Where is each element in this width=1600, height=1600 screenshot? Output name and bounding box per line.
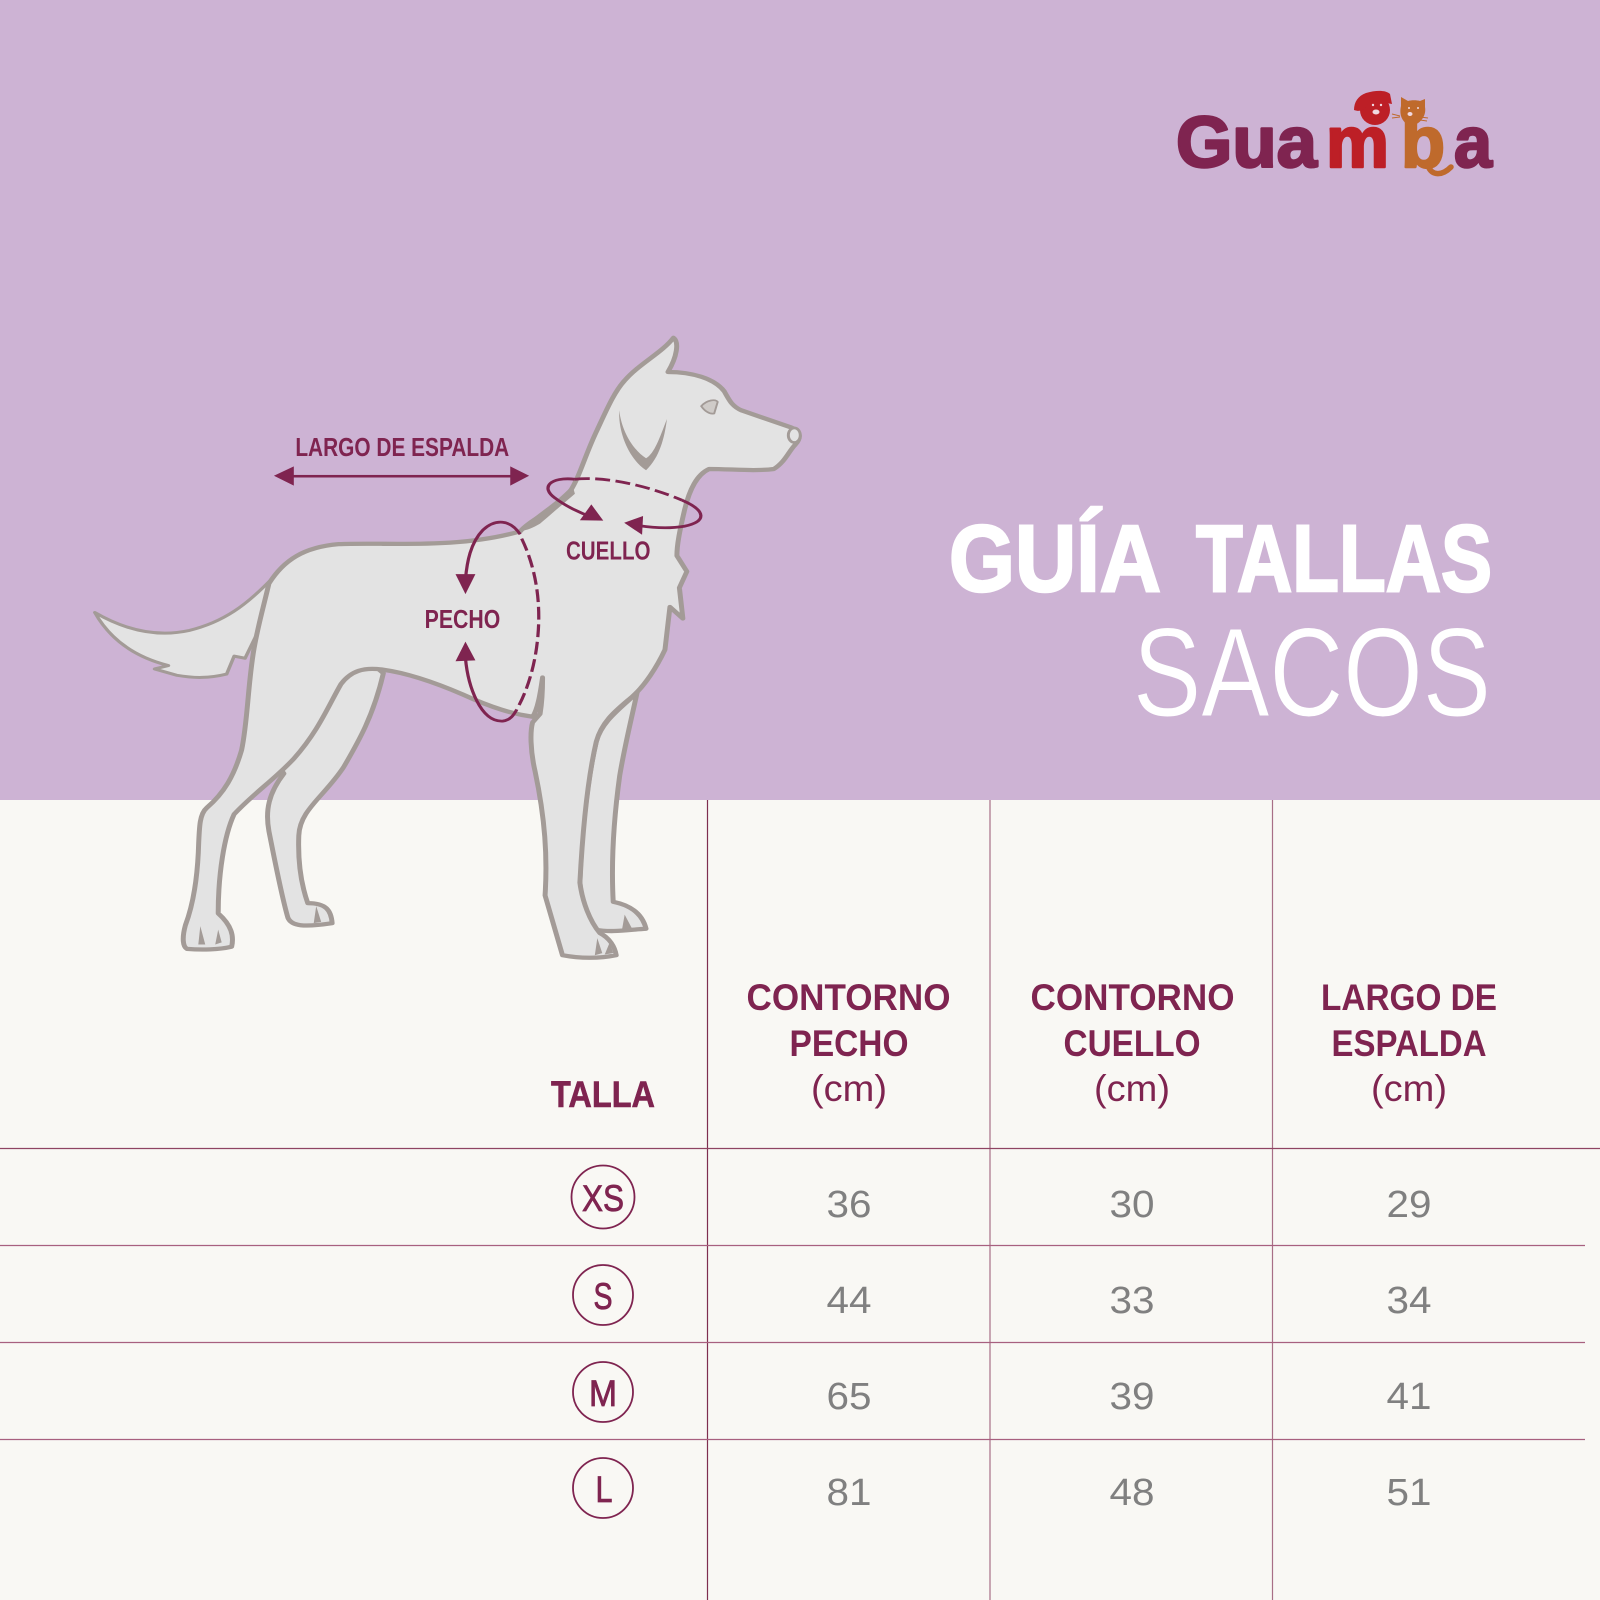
logo wordmark: b: b [1401,103,1445,183]
table values: largo de espalda [1386,1184,1432,1514]
heading: Sacos: SACOS [1133,602,1491,743]
table header: contorno cuello: CUELLO [1064,1023,1200,1064]
icon: cat head [1392,97,1428,126]
table values: contorno cuello: 33 [1110,1280,1154,1322]
logo wordmark: m: m [1326,103,1389,183]
size badge: S [573,1265,633,1325]
label: cuello: CUELLO [566,537,651,565]
table values: contorno pecho: 81 [826,1472,872,1514]
table header: largo de espalda: ESPALDA [1332,1023,1486,1064]
table values: contorno cuello: 39 [1110,1376,1154,1418]
dog: ear [619,410,667,470]
table values: contorno pecho: 44 [826,1280,872,1322]
measure: neck guide [548,479,701,535]
size badge: M: M [589,1373,617,1414]
panel: purple header background [0,0,1600,800]
illustration: dog with measurement guides [95,338,800,958]
table values: largo de espalda: 34 [1386,1280,1432,1322]
table header: largo de espalda: LARGO DE [1321,977,1497,1018]
table header: contorno cuello: (cm) [1094,1068,1170,1109]
table header: contorno pecho: CONTORNO [746,977,950,1018]
table header: talla: TALLA [551,1074,655,1115]
table values: contorno cuello [1110,1184,1154,1514]
title: Guía Tallas Sacos [949,506,1492,743]
table values: contorno cuello: 48 [1110,1472,1154,1514]
table header: largo de espalda: (cm) [1371,1068,1447,1109]
dog: body and near legs [183,338,799,958]
dog: nose [788,428,800,442]
table values: largo de espalda: 51 [1386,1472,1432,1514]
dog: neck fur [520,485,575,531]
label: pecho: PECHO [425,605,500,633]
dog: paw toes [198,906,632,955]
dog: far front leg [580,692,646,931]
table grid lines [0,800,1600,1600]
table values: largo de espalda: 29 [1386,1184,1432,1226]
logo: Guamba [1176,91,1493,183]
table values: contorno pecho [826,1184,872,1514]
heading: Guía Tallas [949,506,1492,612]
size badge: M [573,1362,633,1422]
size badge: S: S [594,1276,612,1317]
table header: contorno pecho: PECHO [790,1023,908,1064]
table header: contorno pecho [746,977,950,1109]
size badge: XS: XS [582,1178,624,1219]
label: largo de espalda: LARGO DE ESPALDA [295,433,509,462]
heading: Guía Tallas: TALLAS [1196,506,1492,612]
size badge: XS [572,1166,634,1228]
logo wordmark: Gua: Gua [1176,103,1318,183]
table values: largo de espalda: 41 [1386,1376,1432,1418]
table values: contorno pecho: 36 [826,1184,872,1226]
table header: contorno cuello: CONTORNO [1030,977,1234,1018]
table values: contorno pecho: 65 [826,1376,872,1418]
dog: tail [95,579,271,677]
size badge: L: L [596,1469,612,1510]
table header: contorno cuello [1030,977,1234,1109]
heading: Guía Tallas: GUÍA [949,506,1161,612]
icon: cat tail [1428,166,1451,174]
logo wordmark: a: a [1454,103,1493,183]
table header: contorno pecho: (cm) [811,1068,887,1109]
icon: dog head [1354,91,1392,125]
dog: eye [701,400,718,414]
size badge: L [573,1458,633,1518]
panel: cream table background [0,800,1600,1600]
measure: chest guide [456,522,539,721]
dog: far hind leg [259,652,383,926]
table values: contorno cuello: 30 [1110,1184,1154,1226]
arrow: largo de espalda [274,466,529,486]
table header: largo de espalda [1321,977,1497,1109]
